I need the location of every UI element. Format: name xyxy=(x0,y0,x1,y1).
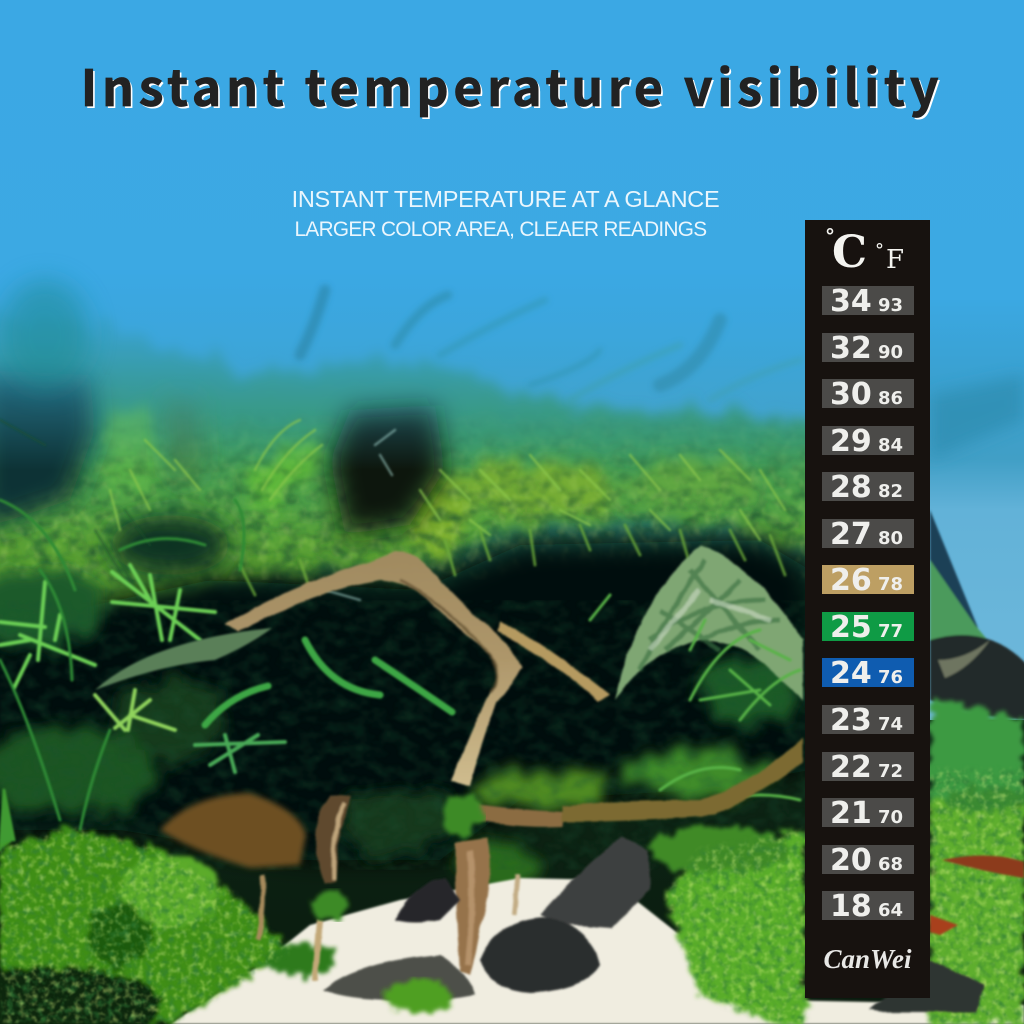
reading 34 / 93: 34 xyxy=(830,284,872,319)
reading 20 / 68 xyxy=(822,845,914,874)
reading 22 / 72: 22 xyxy=(830,750,872,785)
reading 20 / 68: 68 xyxy=(878,854,903,875)
reading 28 / 82 xyxy=(822,472,914,501)
reading 25 / 77 green: 25 xyxy=(830,610,872,645)
reading 25 / 77 green xyxy=(822,612,914,641)
reading 24 / 76 blue: 24 xyxy=(830,656,872,691)
reading 32 / 90: 32 xyxy=(830,331,872,366)
pale blue glass at right xyxy=(925,300,1024,720)
subheading line 2: LARGER COLOR AREA, CLEAER READINGS xyxy=(295,218,706,241)
subheading line 1: INSTANT TEMPERATURE AT A GLANCE xyxy=(292,186,719,212)
reading 23 / 74 xyxy=(822,705,914,734)
brown rock left xyxy=(160,793,306,868)
right background tube and log xyxy=(930,510,1024,720)
moss canopy xyxy=(0,300,830,640)
reading 22 / 72: 72 xyxy=(878,761,903,782)
reading 29 / 84: 84 xyxy=(878,435,903,456)
small moss tuft on sand xyxy=(310,891,350,919)
reading 34 / 93 xyxy=(822,286,914,315)
red shrimp plants xyxy=(930,855,1024,935)
striped leaf xyxy=(615,546,803,700)
canopy texture xyxy=(0,436,805,600)
reading 32 / 90: 90 xyxy=(878,342,903,363)
top-right hazy shape xyxy=(930,375,1024,460)
reading 18 / 64: 18 xyxy=(830,889,872,924)
teal blades against water xyxy=(300,290,800,400)
reading 24 / 76 blue: 76 xyxy=(878,667,903,688)
reading 30 / 86: 30 xyxy=(830,377,872,412)
bright moss patches in canopy xyxy=(100,405,760,562)
reading 20 / 68: 20 xyxy=(830,843,872,878)
unit labels: C xyxy=(832,227,867,278)
midground texture xyxy=(0,600,806,870)
reading 18 / 64 xyxy=(822,891,914,920)
brand name: CanWei xyxy=(823,944,912,974)
left hazy teal column xyxy=(0,280,90,390)
reading 27 / 80 xyxy=(822,519,914,548)
reading 29 / 84 xyxy=(822,426,914,455)
unit labels xyxy=(825,224,904,278)
unit labels: ° xyxy=(875,240,884,261)
reading 26 / 78 tan: 26 xyxy=(830,563,872,598)
title: Instant temperature visibility xyxy=(81,49,943,121)
reading 28 / 82: 82 xyxy=(878,481,903,502)
dark cave and shadows xyxy=(0,540,810,860)
reading 26 / 78 tan xyxy=(822,565,914,594)
reading 27 / 80: 80 xyxy=(878,528,903,549)
background: aquarium scene xyxy=(0,269,1024,1024)
reading 21 / 70: 21 xyxy=(830,796,872,831)
moss tuft on rock xyxy=(386,980,454,1014)
reading 18 / 64: 64 xyxy=(878,900,903,921)
reading 28 / 82: 28 xyxy=(830,470,872,505)
reading 29 / 84: 29 xyxy=(830,424,872,459)
foreground moss xyxy=(0,700,1024,1024)
reading 27 / 80: 27 xyxy=(830,517,872,552)
ferns and leaves xyxy=(0,500,800,850)
foreground moss texture xyxy=(0,768,1024,1024)
dark trunks in moss xyxy=(0,370,445,575)
driftwood xyxy=(225,552,803,980)
rocks xyxy=(322,836,985,1012)
reading 24 / 76 blue xyxy=(822,658,914,687)
broad grey-green leaf xyxy=(95,628,272,690)
unit labels: F xyxy=(886,245,904,275)
reading 30 / 86: 86 xyxy=(878,388,903,409)
thermometer strip xyxy=(805,220,930,998)
reading 21 / 70: 70 xyxy=(878,807,903,828)
moss on driftwood joint xyxy=(442,793,482,837)
reading 26 / 78 tan: 78 xyxy=(878,574,903,595)
reading 23 / 74: 23 xyxy=(830,703,872,738)
sand bed xyxy=(170,878,1024,1024)
reading 21 / 70 xyxy=(822,798,914,827)
unit labels: ° xyxy=(825,224,835,248)
reading 22 / 72 xyxy=(822,752,914,781)
water haze over plants xyxy=(0,270,806,470)
midground greens xyxy=(0,570,800,889)
reading 23 / 74: 74 xyxy=(878,714,903,735)
moss strands xyxy=(0,420,785,600)
reading 32 / 90 xyxy=(822,333,914,362)
reading 30 / 86 xyxy=(822,379,914,408)
reading 34 / 93: 93 xyxy=(878,295,903,316)
reading 25 / 77 green: 77 xyxy=(878,621,903,642)
